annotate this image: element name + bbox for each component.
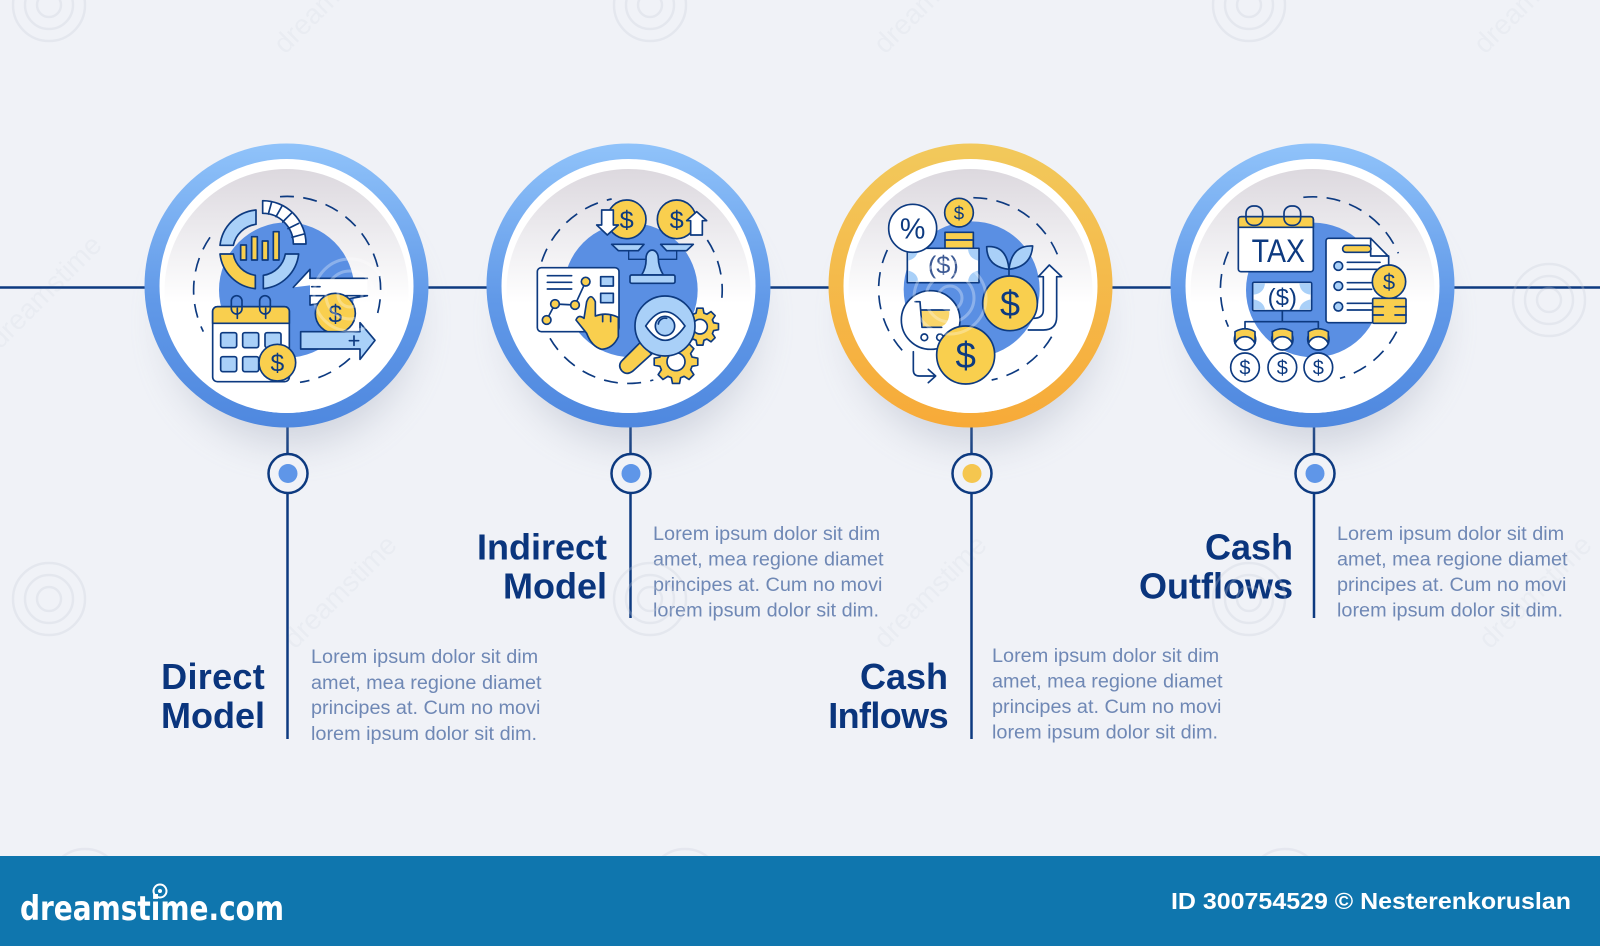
step 4: cash outflows (1139, 144, 1568, 622)
heading: Direct Model: Direct (161, 656, 265, 697)
circle badge 3 (828, 144, 1112, 444)
node marker 2 (612, 454, 650, 493)
icon: direct model calendar and chart: $ (328, 301, 342, 328)
node marker 4 (1296, 454, 1334, 493)
body text 3: amet, mea regione diamet (992, 670, 1223, 692)
horizontal timeline (0, 286, 1600, 289)
icon: indirect model scale, chart and magnifier: $ (670, 207, 684, 235)
icon: cash outflows tax calendar and document: $ (1239, 357, 1251, 379)
icon: direct model calendar and chart (194, 196, 381, 382)
node marker 1 (268, 454, 308, 493)
icon: direct model calendar and chart: $ (270, 351, 284, 378)
step 3: cash inflows (828, 144, 1223, 744)
connector line 2 (629, 420, 632, 618)
icon: cash inflows coins and cart (879, 198, 1062, 384)
icon: cash outflows tax calendar and document: $ (1313, 357, 1324, 379)
circle badge 1 (144, 144, 428, 444)
heading: Cash Outflows: Cash (1205, 526, 1293, 568)
body text 3: lorem ipsum dolor sit dim. (992, 722, 1218, 744)
body text 1: lorem ipsum dolor sit dim. (311, 723, 537, 745)
body text 4: principes at. Cum no movi (1337, 574, 1566, 596)
body text 1: amet, mea regione diamet (311, 672, 542, 694)
icon: cash outflows tax calendar and document: $ (1277, 357, 1288, 379)
body text 1: principes at. Cum no movi (311, 697, 540, 719)
icon: cash outflows tax calendar and document: ($) (1268, 284, 1297, 311)
heading: Cash Inflows: Cash (860, 656, 948, 697)
icon: cash outflows tax calendar and document (1220, 197, 1406, 382)
watermark overlay: dreamstime (1472, 529, 1598, 654)
circle badge 2 (486, 144, 770, 444)
body text 3: principes at. Cum no movi (992, 696, 1221, 718)
body text 3: Lorem ipsum dolor sit dim (992, 645, 1219, 667)
icon: cash inflows coins and cart: ($) (928, 252, 959, 280)
body text 1: Lorem ipsum dolor sit dim (311, 646, 538, 668)
icon: cash inflows coins and cart: $ (1000, 283, 1020, 324)
heading: Indirect Model: Indirect (477, 526, 607, 568)
body text 4: Lorem ipsum dolor sit dim (1337, 523, 1564, 545)
node marker 3 (952, 454, 992, 493)
icon: indirect model scale, chart and magnifier (537, 199, 722, 383)
icon: cash outflows tax calendar and document: TAX (1252, 233, 1305, 269)
icon: indirect model scale, chart and magnifier: $ (620, 207, 634, 235)
body text 2: Lorem ipsum dolor sit dim (653, 523, 880, 545)
connector line 1 (286, 420, 289, 739)
icon: cash inflows coins and cart: % (900, 213, 925, 245)
watermark overlay: dreamstime (867, 529, 993, 654)
body text 4: amet, mea regione diamet (1337, 548, 1568, 570)
connector line 4 (1313, 420, 1315, 618)
icon: cash inflows coins and cart: $ (954, 203, 965, 224)
body text 2: principes at. Cum no movi (653, 574, 882, 596)
image credit: ID 300754529 © Nesterenkoruslan (1171, 888, 1571, 914)
connector line 3 (970, 420, 973, 739)
heading: Cash Outflows: Outflows (1139, 566, 1293, 606)
logo: dreamstime.com: dreamstime.com (20, 889, 284, 929)
heading: Direct Model: Model (161, 695, 265, 736)
watermark overlay: dreamstime (277, 529, 403, 654)
body text 2: lorem ipsum dolor sit dim. (653, 600, 879, 622)
footer banner (0, 856, 1600, 946)
step 2: indirect model (477, 144, 884, 622)
icon: cash inflows coins and cart: $ (955, 335, 976, 376)
body text 2: amet, mea regione diamet (653, 548, 884, 570)
heading: Cash Inflows: Inflows (828, 695, 948, 736)
heading: Indirect Model: Model (503, 566, 607, 606)
circle badge 4 (1170, 144, 1454, 444)
icon: cash outflows tax calendar and document: $ (1383, 270, 1395, 295)
body text 4: lorem ipsum dolor sit dim. (1337, 600, 1563, 622)
step 1: direct model (144, 144, 542, 745)
